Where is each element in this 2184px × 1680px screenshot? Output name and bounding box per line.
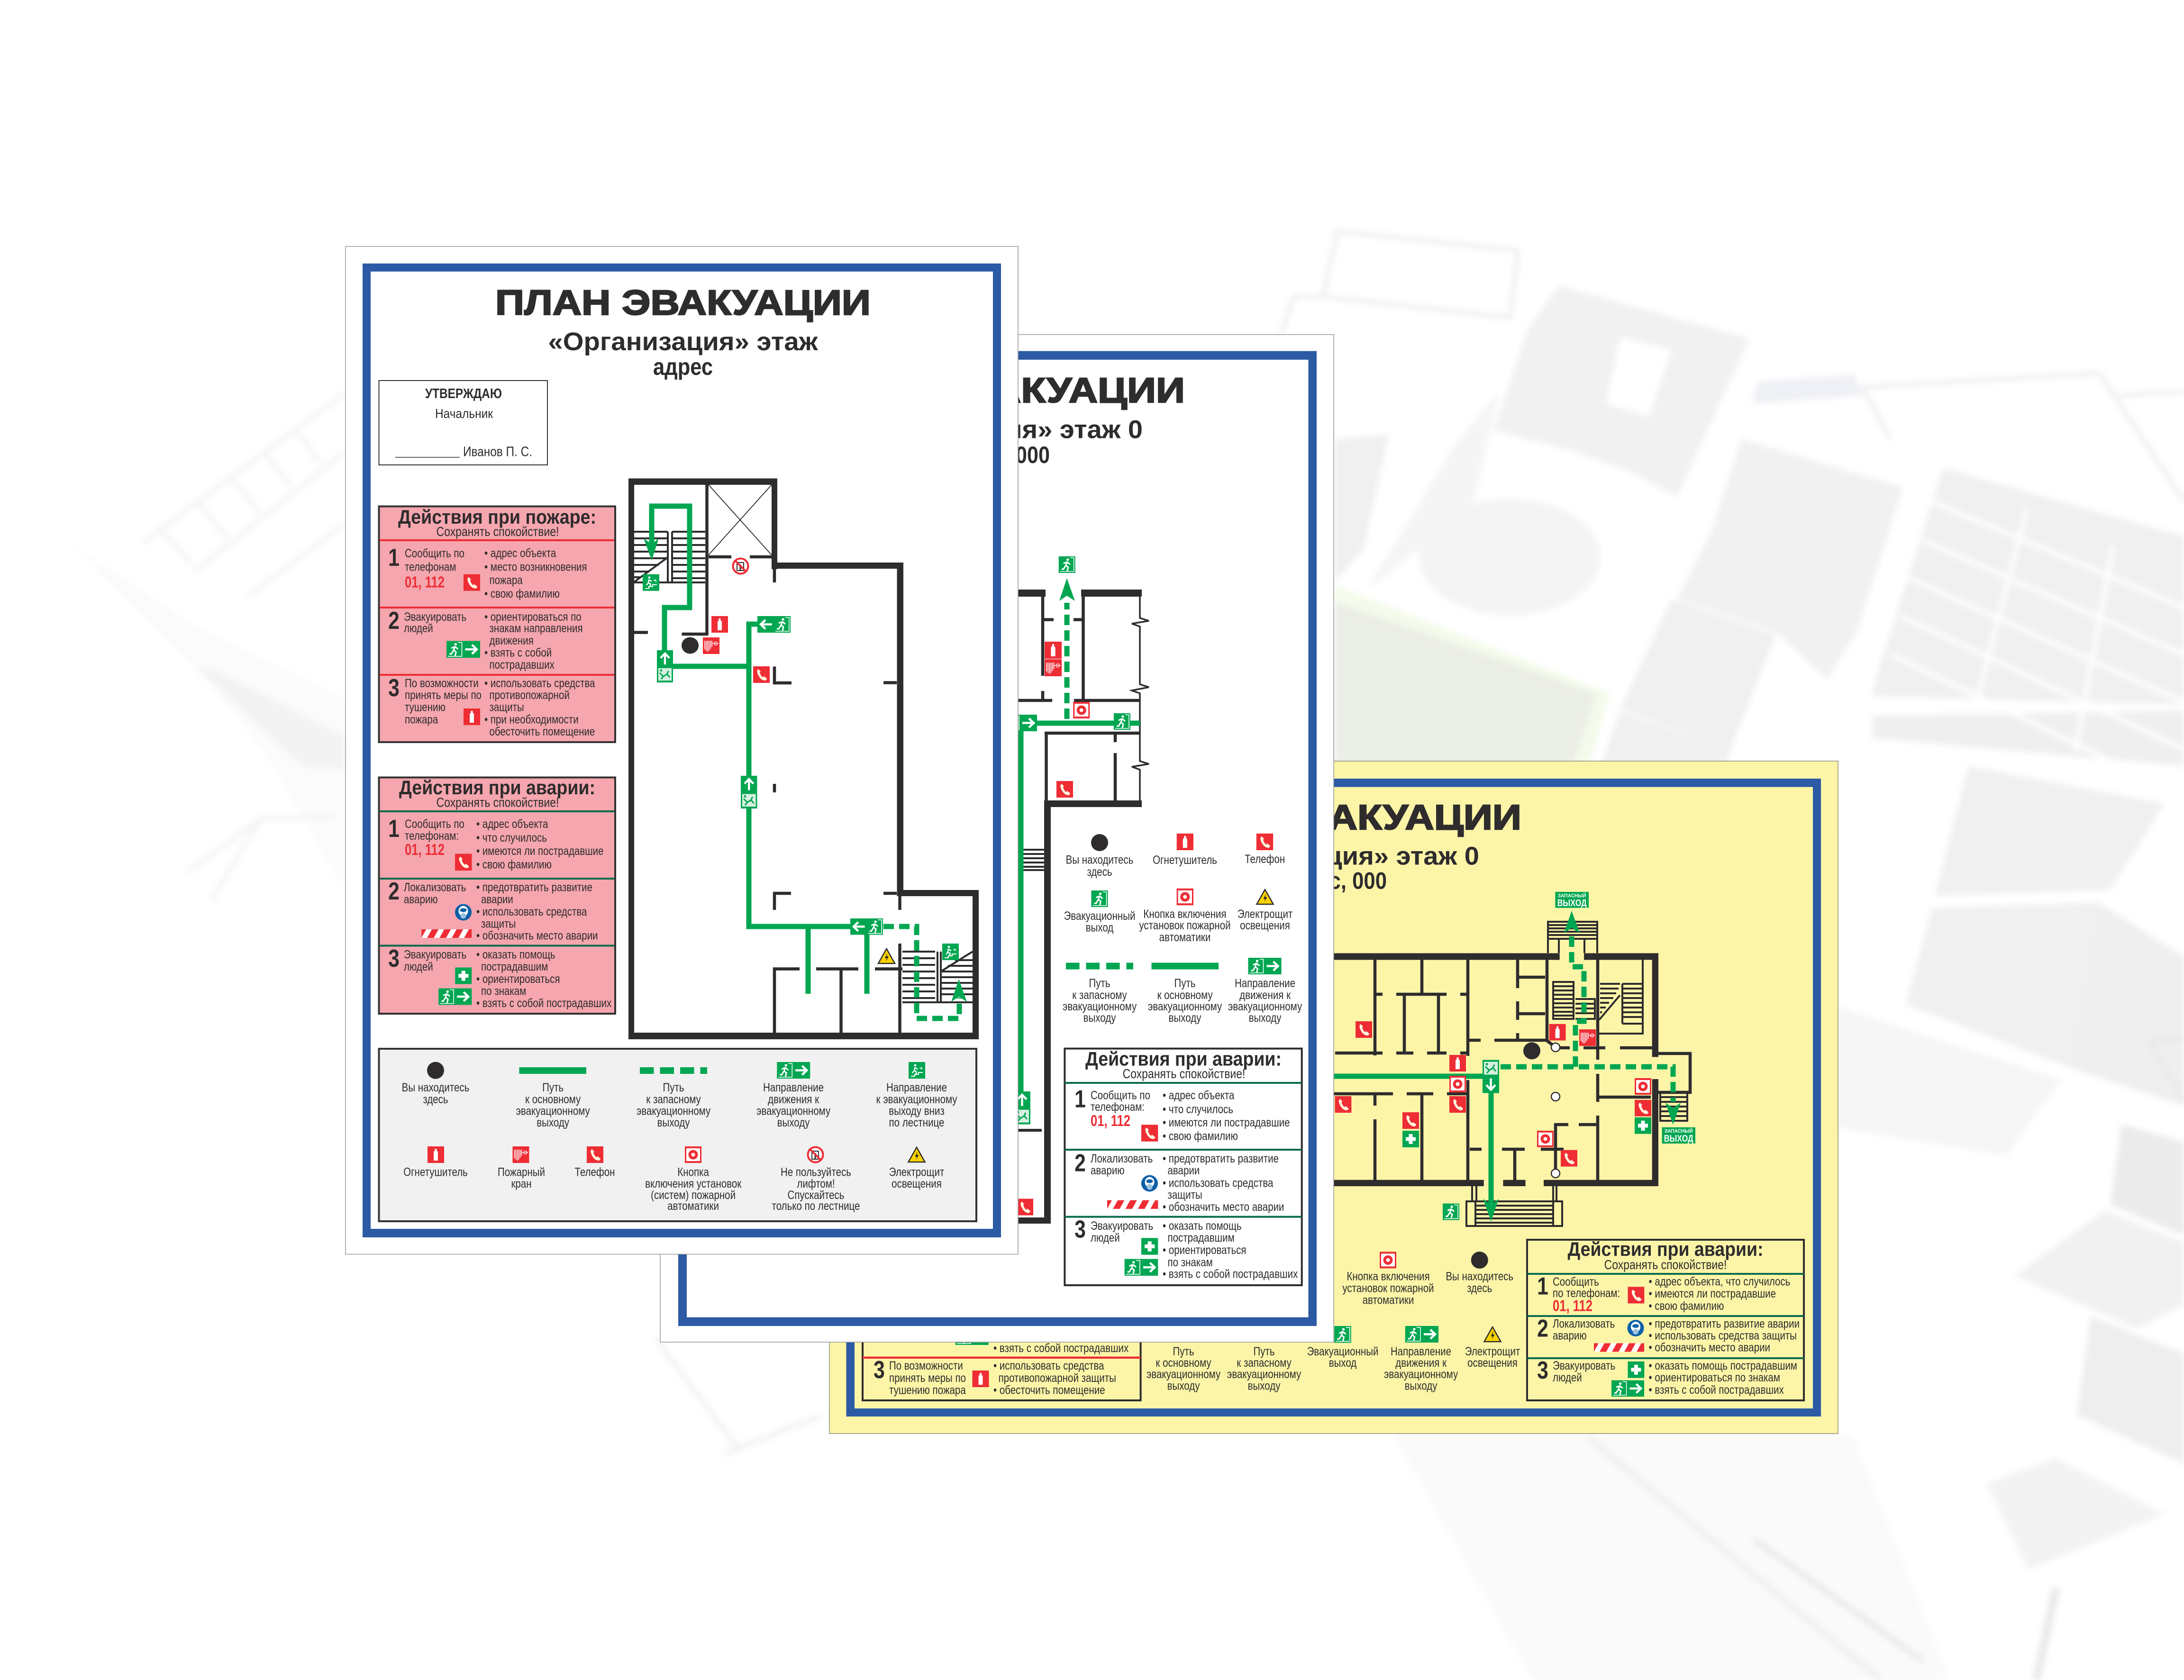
middle poster: accident actions box: Действия при аварии: <box>1085 1048 1282 1070</box>
legend icon: warning <box>1257 890 1273 904</box>
accident step 2: аварии <box>481 892 513 906</box>
legend labels: освещения <box>1240 918 1290 932</box>
legend labels: выход <box>1086 921 1113 934</box>
legend labels: к запасному <box>646 1092 701 1106</box>
yellow plan: safety icons <box>1335 1021 1651 1220</box>
legend labels: автоматики <box>1159 930 1210 944</box>
legend labels <box>402 1081 957 1212</box>
yellow poster: fire actions box (bottom visible part): принять меры по <box>889 1371 966 1384</box>
middle poster: accident actions box: • адрес объекта <box>1163 1089 1235 1102</box>
middle poster: accident actions box: телефонам: <box>1091 1100 1145 1113</box>
middle poster: accident actions box: • что случилось <box>1163 1102 1233 1116</box>
accident step 2: 2 <box>388 878 400 905</box>
fire actions heading <box>398 506 596 539</box>
accident step 1: Сообщить по <box>405 817 464 830</box>
legend labels <box>1147 1270 1520 1392</box>
yellow poster: accident actions box: • предотвратить развитие аварии <box>1649 1317 1800 1330</box>
legend labels: автоматики <box>667 1199 719 1212</box>
yellow poster title <box>1146 798 1521 894</box>
middle poster: accident actions box: Эвакуировать <box>1091 1219 1153 1232</box>
middle poster: accident actions box: пострадавшим <box>1168 1231 1235 1244</box>
legend icon: button <box>1177 889 1193 905</box>
yellow poster: fire actions box (bottom visible part): противопожарной защиты <box>999 1371 1116 1384</box>
legend labels: установок пожарной <box>1139 918 1231 932</box>
legend labels: Вы находитесь <box>1446 1270 1513 1283</box>
middle poster: accident actions box: 1 <box>1074 1086 1086 1113</box>
fire step 2: Эвакуировать <box>404 610 466 623</box>
approval stamp box: Иванов П. С. <box>463 445 532 460</box>
legend icon: phone <box>1256 834 1273 850</box>
yellow plan: reserve exit sign right: ЗАПАСНЫЙ <box>1665 1128 1693 1134</box>
accident step 2: • использовать средства <box>476 905 587 918</box>
yellow poster: accident actions box: • обозначить место аварии <box>1649 1341 1770 1354</box>
middle plan: lower up sign <box>1014 1091 1030 1124</box>
accident step 3: • взять с собой пострадавших <box>476 996 612 1009</box>
legend labels: эвакуационному <box>516 1104 590 1117</box>
middle poster: accident actions box: Сохранять спокойствие! <box>1123 1067 1245 1081</box>
accident step 2: • предотвратить развитие <box>476 881 592 894</box>
middle plan: phone <box>1056 781 1073 798</box>
legend labels: Вы находитесь <box>1066 853 1133 866</box>
accident actions heading: Действия при аварии: <box>399 776 595 799</box>
fire step 3: тушению <box>405 700 446 714</box>
legend labels: Путь <box>663 1081 684 1094</box>
legend labels: эвакуационному <box>1147 1367 1221 1380</box>
legend labels: выходу <box>1167 1379 1200 1392</box>
yellow plan: reserve evacuation routes <box>1501 935 1673 1102</box>
fire step 2 <box>388 607 582 671</box>
accident step 3: по знакам <box>481 984 526 998</box>
middle poster: accident actions box: • предотвратить развитие <box>1163 1152 1279 1165</box>
approval stamp box: УТВЕРЖДАЮ <box>425 386 502 401</box>
legend icon: you are here <box>1091 834 1108 851</box>
legend labels: эвакуационному <box>1227 1367 1301 1380</box>
legend labels: Телефон <box>1245 852 1285 865</box>
legend labels: только по лестнице <box>772 1199 860 1212</box>
fire step 3: пожара <box>405 713 438 726</box>
yellow poster: fire actions box (bottom visible part): 3 <box>874 1356 885 1384</box>
middle poster title: адрес, 000 <box>945 442 1050 468</box>
yellow poster: accident actions box <box>1527 1238 1804 1400</box>
fire step 1 <box>388 544 587 600</box>
legend labels: включения установок <box>645 1177 742 1190</box>
middle plan: button <box>1073 702 1090 718</box>
front plan: you are here <box>682 637 699 654</box>
legend labels: эвакуационному <box>1384 1367 1458 1380</box>
legend labels: движения к <box>1239 988 1291 1001</box>
yellow plan: reserve exit sign top: ЗАПАСНЫЙ <box>1558 893 1586 899</box>
middle poster: accident actions box: • обозначить место аварии <box>1163 1200 1284 1213</box>
middle plan: hose <box>1045 659 1062 676</box>
legend labels: к основному <box>525 1092 581 1106</box>
fire step 1: 01, 112 <box>405 573 445 590</box>
accident step 2: аварию <box>404 892 438 906</box>
middle poster: accident actions box: аварии <box>1168 1163 1200 1177</box>
legend line: reserve route <box>640 1067 707 1074</box>
legend labels: автоматики <box>1363 1293 1414 1307</box>
legend labels: к запасному <box>1072 988 1127 1001</box>
legend labels: эвакуационному <box>756 1104 831 1117</box>
legend labels: Кнопка <box>677 1165 709 1179</box>
middle poster: accident actions box: Локализовать <box>1091 1152 1153 1165</box>
legend labels: Эвакуационный <box>1064 909 1135 922</box>
accident step 2: защиты <box>481 917 516 930</box>
middle poster floor plan <box>995 556 1149 1224</box>
legend labels: выходу <box>537 1116 570 1129</box>
front plan: direction sign lower <box>850 918 883 935</box>
accident step 3: пострадавшим <box>481 960 548 973</box>
accident step 1: • что случилось <box>476 831 547 844</box>
yellow poster: fire actions box (bottom visible part) <box>863 1185 1141 1400</box>
yellow poster: accident actions box: • имеются ли пострадавшие <box>1649 1287 1776 1300</box>
fire step 3: • при необходимости <box>484 713 579 726</box>
middle poster: accident actions box: людей <box>1091 1231 1120 1244</box>
legend icon: phone <box>587 1146 603 1163</box>
yellow plan: fall / down sign <box>1483 1060 1499 1093</box>
legend labels: Огнетушитель <box>403 1165 468 1179</box>
legend labels: Путь <box>1173 1344 1194 1358</box>
fire step 1: телефонам <box>405 560 456 573</box>
legend labels: эвакуационному <box>637 1104 711 1117</box>
accident step 1 <box>388 815 604 871</box>
legend labels: Направление <box>1391 1344 1451 1358</box>
middle poster: accident actions box: • ориентироваться <box>1163 1243 1247 1256</box>
middle poster: accident actions box: 3 <box>1074 1216 1086 1244</box>
middle plan: reserve route <box>1065 603 1069 719</box>
middle plan: up arrowhead <box>1059 578 1075 601</box>
legend labels: здесь <box>1467 1281 1492 1295</box>
legend labels: установок пожарной <box>1342 1281 1434 1295</box>
middle plan: exit sign corridor <box>1114 713 1130 730</box>
middle poster: accident actions box: • оказать помощь <box>1163 1219 1242 1232</box>
middle poster title: «Организация» этаж 0 <box>852 415 1143 444</box>
accident actions heading: Сохранять спокойствие! <box>437 795 559 810</box>
yellow poster: accident actions box: 2 <box>1537 1315 1548 1343</box>
yellow poster: accident actions box: • адрес объекта, что случилось <box>1649 1275 1790 1288</box>
legend icon: you are here <box>1471 1252 1488 1269</box>
approval stamp box: Начальник <box>435 406 493 421</box>
accident step 1: • имеются ли пострадавшие <box>476 844 604 857</box>
legend labels: Эвакуационный <box>1307 1344 1378 1358</box>
legend line: main route <box>1152 963 1219 970</box>
middle poster: accident actions box: • свою фамилию <box>1163 1129 1238 1143</box>
middle plan: lower phone <box>1017 1199 1033 1215</box>
legend labels: Направление <box>763 1081 824 1094</box>
legend line: main route <box>519 1067 586 1074</box>
legend labels: (систем) пожарной <box>651 1188 736 1201</box>
front plan: arrowheads <box>644 538 967 1002</box>
yellow poster: accident actions box: аварию <box>1553 1329 1587 1342</box>
accident step 3: Эвакуировать <box>404 948 466 961</box>
accident step 2: • обозначить место аварии <box>476 929 598 942</box>
middle plan: exit sign top <box>1059 556 1075 573</box>
legend icon: warning <box>1484 1327 1501 1342</box>
legend labels: Путь <box>1174 976 1196 990</box>
legend labels: Путь <box>1253 1344 1275 1358</box>
legend labels: к эвакуационному <box>876 1092 957 1106</box>
yellow poster title: «Организация» этаж 0 <box>1188 842 1479 870</box>
front plan: extinguisher <box>711 616 728 633</box>
yellow poster: fire actions box (bottom visible part): • использовать средства <box>993 1359 1104 1372</box>
legend labels: выходу <box>1248 1379 1281 1392</box>
legend labels: Пожарный <box>498 1165 545 1179</box>
accident step 3: 3 <box>388 945 400 972</box>
legend labels: выходу <box>1249 1011 1282 1024</box>
legend icon: exit <box>1091 890 1108 907</box>
fire step 1: • адрес объекта <box>484 546 556 560</box>
front plan: mid up sign <box>741 776 757 808</box>
accident step 3 <box>388 945 612 1009</box>
legend labels: Путь <box>542 1081 564 1094</box>
front plan: stair sign lower <box>942 944 959 960</box>
legend labels: Электрощит <box>889 1165 945 1179</box>
yellow poster title: адрес, 000 <box>1281 867 1387 894</box>
fire step 1: • свою фамилию <box>484 587 560 600</box>
legend labels: к запасному <box>1237 1356 1292 1369</box>
middle poster title: ПЛАН ЭВАКУАЦИИ <box>810 371 1185 410</box>
legend labels: Направление <box>1235 976 1295 990</box>
accident step 2 <box>388 878 598 942</box>
yellow plan: reserve exit sign top <box>1555 892 1589 908</box>
yellow poster: legend <box>1147 1252 1520 1392</box>
yellow poster: fire actions box (bottom visible part): • взять с собой пострадавших <box>993 1341 1129 1354</box>
middle poster: accident actions box: • имеются ли пострадавшие <box>1163 1116 1290 1129</box>
accident step 1: телефонам: <box>405 829 459 842</box>
legend icon: extinguisher <box>1177 834 1193 850</box>
fire step 2: • взять с собой <box>484 646 552 659</box>
legend labels: выход <box>1329 1356 1356 1369</box>
fire actions heading: Действия при пожаре: <box>398 506 596 528</box>
fire step 2: • ориентироваться по <box>484 610 582 623</box>
poster 3: yellow landscape plan <box>829 761 1838 1434</box>
yellow poster: accident actions box: Эвакуировать <box>1553 1359 1615 1372</box>
legend labels: по лестнице <box>889 1116 944 1129</box>
legend labels: Вы находитесь <box>402 1081 469 1094</box>
front plan: reserve route <box>883 926 959 1018</box>
middle poster title <box>810 371 1185 468</box>
accident step 1: 01, 112 <box>405 841 445 858</box>
legend labels: здесь <box>1087 865 1112 878</box>
accident step 3: людей <box>404 960 433 973</box>
yellow poster floor plan <box>1327 892 1695 1226</box>
front plan: main route <box>652 506 867 994</box>
yellow poster: accident actions box: • взять с собой пострадавших <box>1649 1383 1784 1396</box>
yellow poster: accident actions box: 01, 112 <box>1553 1297 1592 1315</box>
yellow plan: reserve exit sign right: ВЫХОД <box>1664 1134 1693 1144</box>
yellow plan: route arrowheads <box>1483 911 1681 1221</box>
legend icon: no lift <box>808 1147 823 1162</box>
yellow poster: accident actions box: Сохранять спокойствие! <box>1604 1258 1727 1272</box>
legend labels <box>1063 852 1302 1024</box>
yellow poster: accident actions box: Сообщить <box>1553 1275 1599 1288</box>
front plan: electrical warning <box>878 949 895 963</box>
front plan: no lift <box>733 558 748 573</box>
fire step 3: защиты <box>490 700 524 714</box>
legend labels: к основному <box>1156 1356 1211 1369</box>
legend labels: Путь <box>1089 976 1110 990</box>
front plan: phone <box>753 666 770 683</box>
yellow poster: accident actions box: • свою фамилию <box>1649 1299 1724 1312</box>
fire step 3: По возможности <box>405 676 479 690</box>
middle plan: direction sign <box>1004 715 1037 731</box>
legend icon: direction <box>777 1062 810 1079</box>
legend labels: эвакуационному <box>1063 999 1137 1013</box>
fire step 3: принять меры по <box>405 688 482 701</box>
poster 2: white middle plan <box>660 335 1334 1342</box>
yellow poster: fire actions box (bottom visible part): По возможности <box>889 1359 963 1372</box>
front plan: hose <box>703 637 719 654</box>
yellow poster: accident actions box: 3 <box>1537 1357 1548 1384</box>
middle poster: accident actions box: • использовать средства <box>1163 1176 1274 1190</box>
legend labels: Огнетушитель <box>1153 853 1217 866</box>
yellow poster title: ПЛАН ЭВАКУАЦИИ <box>1146 798 1521 837</box>
yellow poster: fire actions box (bottom visible part): тушению пожара <box>889 1383 966 1397</box>
accident step 3: • оказать помощь <box>476 948 555 961</box>
fire step 3 <box>388 674 595 738</box>
legend icon: stair direction <box>909 1062 925 1079</box>
legend labels: Кнопка включения <box>1347 1270 1430 1283</box>
yellow plan: reserve exit sign right <box>1662 1127 1695 1144</box>
yellow poster: accident actions box: • использовать средства защиты <box>1649 1329 1797 1342</box>
fire step 1: пожара <box>490 573 523 587</box>
middle poster: accident actions box: по знакам <box>1168 1255 1213 1269</box>
middle poster: accident actions box: • взять с собой пострадавших <box>1163 1267 1298 1280</box>
legend labels: Не пользуйтесь <box>781 1165 851 1179</box>
middle poster: accident actions box: 01, 112 <box>1091 1112 1130 1129</box>
fire step 2: 2 <box>388 607 400 635</box>
fire actions heading: Сохранять спокойствие! <box>437 525 559 539</box>
legend labels: освещения <box>892 1177 942 1190</box>
legend labels: выходу вниз <box>889 1104 945 1117</box>
accident step 2: Локализовать <box>404 881 466 894</box>
middle plan: main route <box>1005 723 1140 1092</box>
front poster floor plan <box>628 479 979 1039</box>
legend panel <box>379 1049 976 1221</box>
legend icon: hose <box>513 1146 529 1163</box>
legend labels: кран <box>511 1177 532 1190</box>
legend icon: direction <box>1248 958 1282 974</box>
legend icon: extinguisher <box>428 1146 444 1163</box>
yellow poster: accident actions box: • ориентироваться по знакам <box>1649 1371 1780 1384</box>
front plan: direction sign upper <box>757 616 791 633</box>
yellow poster: accident actions box: Действия при аварии: <box>1568 1238 1763 1260</box>
legend labels: к основному <box>1157 988 1213 1001</box>
front plan: stair sign upper <box>643 574 659 591</box>
legend labels: Телефон <box>574 1165 615 1179</box>
yellow plan: reserve exit sign top: ВЫХОД <box>1557 898 1587 908</box>
approval stamp box <box>379 381 547 465</box>
yellow poster: accident actions box: • оказать помощь пострадавшим <box>1649 1359 1797 1372</box>
legend labels: Электрощит <box>1465 1344 1520 1358</box>
legend icon: button <box>1380 1252 1396 1268</box>
yellow poster: accident actions box: 1 <box>1537 1273 1548 1300</box>
legend labels: здесь <box>423 1092 448 1106</box>
legend labels: Электрощит <box>1238 907 1293 920</box>
accident step 3: • ориентироваться <box>476 972 560 985</box>
legend labels: выходу <box>657 1116 690 1129</box>
front poster title: ПЛАН ЭВАКУАЦИИ <box>495 283 871 322</box>
middle poster: accident actions box: 2 <box>1074 1150 1086 1177</box>
yellow poster: accident actions box: Локализовать <box>1553 1317 1615 1330</box>
middle poster: accident actions box <box>1065 1048 1302 1285</box>
yellow plan: you are here dot <box>1523 1042 1540 1059</box>
accident step 1: 1 <box>388 815 400 843</box>
legend line: reserve route <box>1066 963 1133 970</box>
legend labels: движения к <box>1395 1356 1447 1369</box>
fire step 1: • место возникновения <box>484 560 587 573</box>
legend icon: direction <box>1405 1326 1438 1343</box>
fire step 3: обесточить помещение <box>490 725 595 738</box>
yellow poster: fire actions box (bottom visible part): • обесточить помещение <box>993 1383 1105 1397</box>
accident actions panel <box>379 776 615 1014</box>
accident step 1: • адрес объекта <box>476 817 548 830</box>
fire step 2: пострадавших <box>490 658 555 671</box>
yellow poster: accident actions box: людей <box>1553 1371 1582 1384</box>
fire step 2: людей <box>404 621 433 635</box>
legend labels: Спускайтесь <box>788 1188 844 1201</box>
yellow poster: accident actions box: по телефонам: <box>1553 1286 1620 1299</box>
front poster subtitle: «Организация» этаж <box>548 327 818 356</box>
legend labels: выходу <box>1405 1379 1438 1392</box>
middle poster: accident actions box: Сообщить по <box>1091 1089 1150 1102</box>
legend labels: эвакуационному <box>1148 999 1222 1013</box>
legend labels: освещения <box>1467 1356 1518 1369</box>
middle poster: accident actions box: аварию <box>1091 1163 1125 1177</box>
legend icon: exit <box>1334 1326 1351 1343</box>
middle poster: accident actions box: защиты <box>1168 1188 1202 1201</box>
legend icon: button <box>685 1146 701 1163</box>
front plan: up sign <box>657 650 673 682</box>
legend labels: выходу <box>1169 1011 1201 1024</box>
legend icon: you are here <box>427 1062 444 1079</box>
legend labels: движения к <box>768 1092 819 1106</box>
legend icon: warning <box>908 1147 925 1162</box>
fire actions panel <box>379 506 615 742</box>
fire step 3: противопожарной <box>490 688 570 701</box>
legend labels: выходу <box>1083 1011 1116 1024</box>
middle plan: extinguisher <box>1045 642 1062 659</box>
fire step 2: знакам направления <box>490 621 582 635</box>
yellow plan: main evacuation route <box>1327 1076 1491 1204</box>
legend labels: выходу <box>777 1116 810 1129</box>
fire step 1: Сообщить по <box>405 546 464 560</box>
fire step 3: 3 <box>388 674 400 702</box>
legend labels: Кнопка включения <box>1143 907 1227 920</box>
accident step 1: • свою фамилию <box>476 858 552 871</box>
fire step 1: 1 <box>388 544 400 572</box>
front poster address: адрес <box>653 354 713 380</box>
middle poster legend <box>1063 834 1302 1024</box>
poster 1: front white plan <box>346 246 1018 1254</box>
legend labels: Направление <box>886 1081 947 1094</box>
legend labels: эвакуационному <box>1228 999 1302 1013</box>
legend labels: лифтом! <box>797 1177 835 1190</box>
fire step 3: • использовать средства <box>484 676 595 690</box>
fire step 2: движения <box>490 634 534 647</box>
accident actions heading <box>399 776 595 810</box>
